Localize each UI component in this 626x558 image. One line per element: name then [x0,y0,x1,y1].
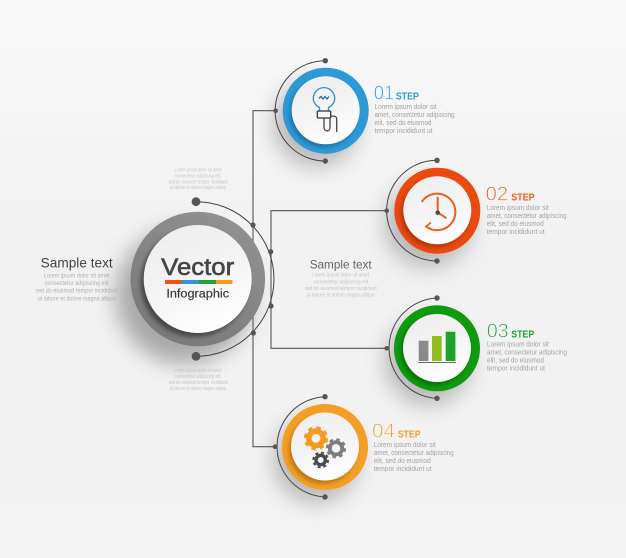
step number and label [372,421,421,443]
icon: gears [305,428,345,467]
step number and label: 03 [487,320,509,342]
text block: left sample text: sed do eiusmod tempor incididunt [35,288,118,295]
text block: middle sample text: Sample text [310,258,372,272]
central title: Infographic [166,288,229,300]
step description: Lorem ipsum dolor sit [487,203,549,212]
drop shadows [116,81,471,503]
central arc with dots [192,197,274,361]
text block: left sample text: ut labore et dolore magna aliqua [38,295,116,302]
text block: below central circle: consectetur adipiscing elit, [174,374,222,380]
panel: central circle [130,197,274,361]
text block: below central circle: ut labore et dolore magna aliqua [170,386,226,392]
step description: Lorem ipsum dolor sit [374,102,436,111]
step number and label: STEP [511,192,535,204]
arc with dots [273,58,328,164]
step number and label [374,82,419,104]
step description: elit, sed do eiusmod [487,356,544,365]
step description: amet, consectetur adipiscing [487,211,567,220]
text block: left sample text: Sample text [41,256,113,271]
text block: below central circle [168,368,228,392]
text block: middle sample text: Lorem ipsum dolor sit amet [312,273,370,279]
text block: below central circle: Lorem ipsum dolor sit amet [174,368,222,374]
arc with dots [273,394,328,500]
step description: tempor incididunt ut [374,126,432,135]
text block: above central circle: sed do eiusmod tempor incididunt [168,179,228,185]
central title: Vector [161,254,234,281]
text block: below central circle: sed do eiusmod tempor incididunt [168,380,228,386]
step description: elit, sed do eiusmod [487,219,544,228]
text block: left sample text: Lorem ipsum dolor sit amet [44,272,110,279]
step description [374,440,454,473]
step description: tempor incididunt ut [374,464,432,473]
step number and label: STEP [511,328,534,340]
icon: light bulb [313,88,337,132]
step description: tempor incididunt ut [487,364,545,373]
step number and label [487,320,534,342]
panel: step 02 [384,158,567,264]
connector lines [253,111,387,447]
step description: elit, sed do eiusmod [374,118,432,127]
step description: Lorem ipsum dolor sit [487,340,549,349]
central title [161,254,234,300]
step number and label: 01 [374,82,394,104]
step description [374,102,454,135]
step description: tempor incididunt ut [487,227,545,236]
panel: step 01 [273,58,454,164]
arc with dots [384,158,440,264]
text block: middle sample text [305,258,377,299]
icon: bar chart [418,332,456,363]
step description: Lorem ipsum dolor sit [374,440,436,449]
step description: amet, consectetur adipiscing [487,348,567,357]
step description: elit, sed do eiusmod [374,456,431,465]
panel: step 04 [273,394,454,500]
step description: amet, consectetur adipiscing [374,448,454,457]
text block: above central circle: ut labore et dolore magna aliqua [170,185,226,191]
step number and label: STEP [396,90,419,102]
step number and label [486,184,535,206]
text block: left sample text: consectetur adipiscing elit [45,280,109,287]
text block: above central circle: Lorem ipsum dolor sit amet [174,168,222,174]
step number and label: 02 [486,184,508,206]
text block: above central circle [168,168,228,191]
arc with dots [384,295,440,401]
text block: middle sample text: sed do eiusmod tempor incididunt [305,286,377,292]
text block: left sample text [35,256,118,302]
text block: middle sample text: ut labore et dolore magna aliqua [307,293,375,299]
text block: middle sample text: consectetur adipiscing elit [313,279,369,285]
step number and label: STEP [398,429,421,441]
icon: clock with arrow [422,194,455,230]
text block: above central circle: consectetur adipiscing elit, [174,174,222,180]
step description: amet, consectetur adipiscing [374,110,454,119]
step description [487,203,567,236]
step number and label: 04 [372,421,395,443]
panel: step 03 [384,295,567,401]
step description [487,340,567,373]
